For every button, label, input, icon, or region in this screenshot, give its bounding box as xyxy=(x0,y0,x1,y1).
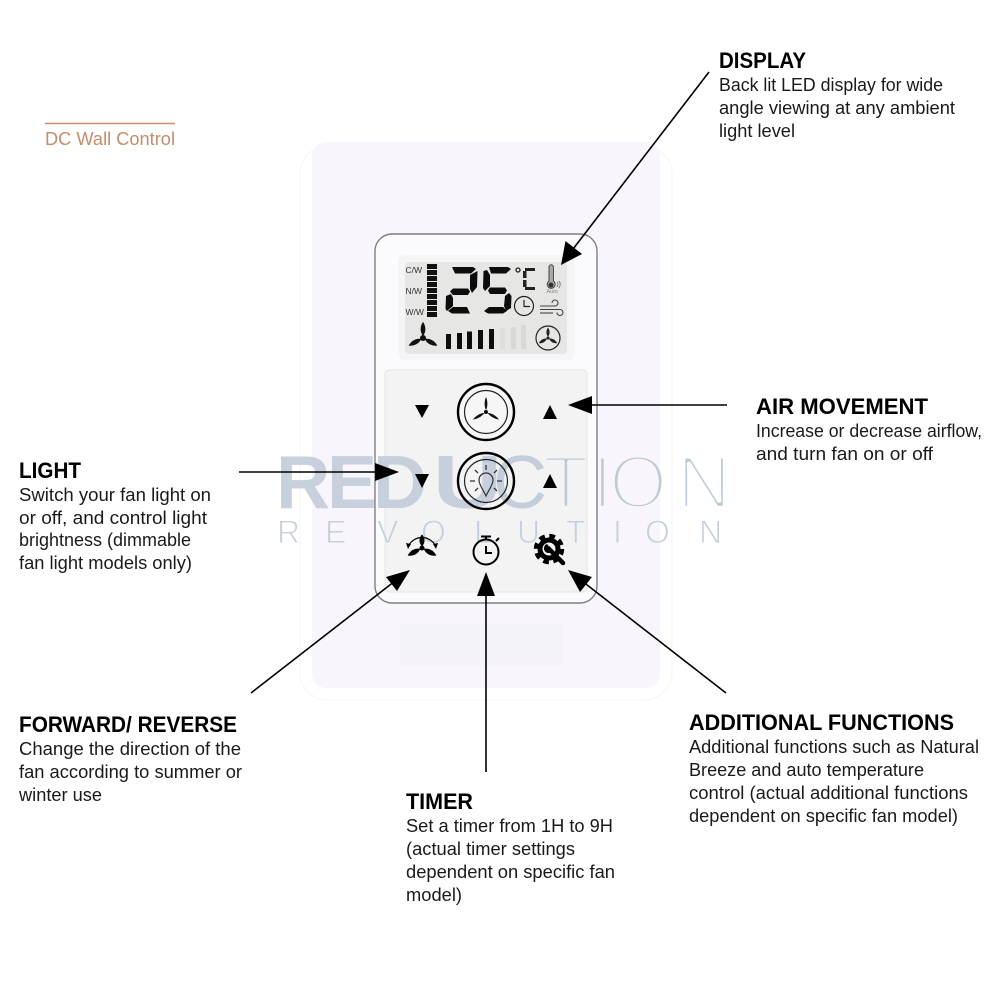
text: forward reverse: Change the direction of the xyxy=(19,739,241,759)
text: display: angle viewing at any ambient xyxy=(719,98,955,118)
text: display: DISPLAY xyxy=(719,48,806,73)
timer icon xyxy=(474,536,499,564)
arrow: forward reverse xyxy=(251,570,410,693)
large fan xyxy=(408,322,438,348)
fan mode icon xyxy=(536,326,560,350)
text: additional functions: dependent on specific fan model) xyxy=(689,806,958,826)
text: forward reverse: FORWARD/ REVERSE xyxy=(19,712,237,737)
thermometer auto icon xyxy=(546,265,560,295)
arrow: display xyxy=(561,72,709,265)
temperature digits 25 xyxy=(446,267,512,314)
watermark: Reduction Revolution: REVOLUTION xyxy=(277,514,722,550)
text: forward reverse xyxy=(18,712,242,805)
text: additional functions: Additional functions such as Natural xyxy=(689,737,979,757)
LCD labels: C/W xyxy=(406,265,422,275)
text: additional functions: control (actual additional functions xyxy=(689,783,968,803)
text: light: brightness (dimmable xyxy=(19,530,191,550)
arrow: air movement xyxy=(568,396,727,414)
text: light: Switch your fan light on xyxy=(19,485,211,505)
watermark: Reduction Revolution: TION xyxy=(543,440,731,524)
wall plate xyxy=(300,142,672,700)
up triangle: light xyxy=(543,474,557,488)
watermark: Reduction Revolution: R xyxy=(276,440,330,524)
down triangle: air xyxy=(415,405,429,418)
text: light xyxy=(19,458,211,573)
text: air movement: and turn fan on or off xyxy=(756,444,934,464)
watermark: Reduction Revolution: D xyxy=(373,440,427,524)
text: light: LIGHT xyxy=(19,458,82,483)
settings gear icon xyxy=(536,536,563,563)
watermark: Reduction Revolution xyxy=(280,455,723,543)
arrow: additional functions xyxy=(568,570,726,693)
fan button xyxy=(458,384,514,440)
section label: DC Wall Control: DC Wall Control xyxy=(45,129,175,149)
up triangle: air xyxy=(543,405,557,419)
LCD labels: N/W xyxy=(406,286,422,296)
text: forward reverse: winter use xyxy=(18,785,102,805)
text: forward reverse: fan according to summer or xyxy=(19,762,242,782)
thermometer auto icon: Auto xyxy=(546,289,558,295)
down triangle: light xyxy=(415,474,429,488)
light button xyxy=(458,453,514,509)
degree C xyxy=(516,268,535,290)
text: timer: dependent on specific fan xyxy=(406,862,615,882)
watermark: Reduction Revolution: E xyxy=(327,440,377,524)
fan speed bars xyxy=(446,325,526,349)
LCD labels: W/W xyxy=(406,307,424,317)
arrow: light xyxy=(239,463,399,481)
text: timer: (actual timer settings xyxy=(406,839,575,859)
text: light: or off, and control light xyxy=(19,508,207,528)
text: light: fan light models only) xyxy=(19,553,192,573)
forward/reverse icon xyxy=(406,534,438,558)
LCD display background xyxy=(398,255,575,360)
clock icon xyxy=(514,296,534,316)
text: display: Back lit LED display for wide xyxy=(719,75,943,95)
watermark: Reduction Revolution: U xyxy=(433,440,502,524)
arrow: timer xyxy=(477,572,495,772)
text: air movement: AIR MOVEMENT xyxy=(756,394,929,419)
wind icon xyxy=(540,300,563,316)
text: display: light level xyxy=(719,121,795,141)
text: air movement xyxy=(756,394,982,464)
text: additional functions: ADDITIONAL FUNCTIONS xyxy=(689,710,954,735)
text: additional functions xyxy=(689,710,979,826)
LCD readout xyxy=(406,264,563,350)
text: timer: TIMER xyxy=(406,789,473,814)
watermark: Reduction Revolution: C xyxy=(493,440,547,524)
text: timer xyxy=(406,789,615,905)
light level bar xyxy=(427,264,437,317)
button panel xyxy=(385,370,587,592)
text: timer: model) xyxy=(406,885,462,905)
LCD labels xyxy=(406,265,424,317)
control frame xyxy=(375,234,597,603)
text: display xyxy=(719,48,955,141)
text: timer: Set a timer from 1H to 9H xyxy=(406,816,613,836)
text: air movement: Increase or decrease airflow, xyxy=(756,421,982,441)
text: additional functions: Breeze and auto temperature xyxy=(689,760,924,780)
